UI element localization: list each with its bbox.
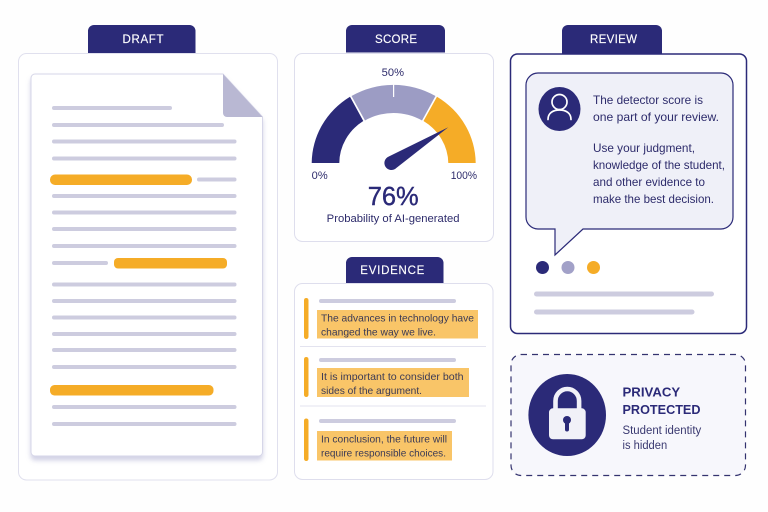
panel: review — [510, 25, 746, 334]
evidence item 1: changed the way we live. — [321, 326, 436, 338]
evidence item 1: The advances in technology have — [321, 312, 474, 324]
panel: draft — [18, 25, 278, 480]
tab: evidence — [346, 257, 444, 283]
speech bubble — [526, 73, 733, 255]
privacy heading — [622, 386, 700, 417]
review message: and other evidence to — [593, 175, 705, 189]
review message: The detector score is — [593, 93, 703, 107]
icon: padlock — [528, 374, 606, 456]
tab: draft: DRAFT — [122, 34, 164, 46]
evidence item 3: require responsible choices. — [321, 448, 446, 460]
review panel frame — [510, 54, 746, 334]
review message: knowledge of the student, — [593, 158, 725, 172]
panel: evidence — [294, 257, 493, 480]
document text lines — [52, 106, 236, 426]
evidence item 1 — [304, 298, 478, 339]
privacy panel frame — [511, 354, 746, 476]
panel: privacy — [511, 354, 746, 476]
draft panel frame — [18, 54, 278, 480]
privacy heading: PROTECTED — [622, 403, 700, 417]
panel: score — [294, 25, 494, 242]
highlighted passages — [50, 174, 227, 396]
tab: review — [562, 25, 662, 54]
tab: draft — [88, 25, 196, 53]
document page — [31, 74, 262, 456]
gauge chart: 100% — [451, 170, 477, 182]
tab: score: SCORE — [375, 34, 417, 46]
review message: one part of your review. — [593, 110, 719, 124]
tab: score — [346, 25, 445, 52]
evidence item 2: sides of the argument. — [321, 385, 422, 397]
gauge chart — [312, 67, 477, 182]
review message: Use your judgment, — [593, 141, 695, 155]
tab: review: REVIEW — [590, 34, 637, 46]
score value: 76% — [368, 181, 419, 211]
evidence item 2 — [304, 357, 469, 397]
icon: folded corner — [223, 74, 262, 117]
evidence panel frame — [294, 284, 493, 480]
review message: make the best decision. — [593, 192, 714, 206]
evidence item 3: In conclusion, the future will — [321, 434, 447, 446]
placeholder lines — [534, 292, 714, 314]
gauge labels: 50% — [382, 67, 404, 79]
score caption: Probability of AI-generated — [327, 213, 460, 225]
privacy heading: PRIVACY — [622, 386, 681, 400]
evidence item 2: It is important to consider both — [321, 371, 464, 383]
evidence item 3 — [304, 418, 456, 461]
score panel frame — [294, 54, 494, 242]
gauge chart: 0% — [312, 170, 328, 182]
privacy note: Student identity — [622, 425, 701, 437]
tab: evidence: EVIDENCE — [360, 265, 425, 277]
icon: person avatar — [538, 87, 580, 131]
status dots — [536, 261, 600, 274]
privacy note: is hidden — [622, 440, 667, 452]
review message — [593, 93, 725, 206]
gauge needle — [384, 127, 448, 170]
privacy note — [622, 425, 701, 452]
